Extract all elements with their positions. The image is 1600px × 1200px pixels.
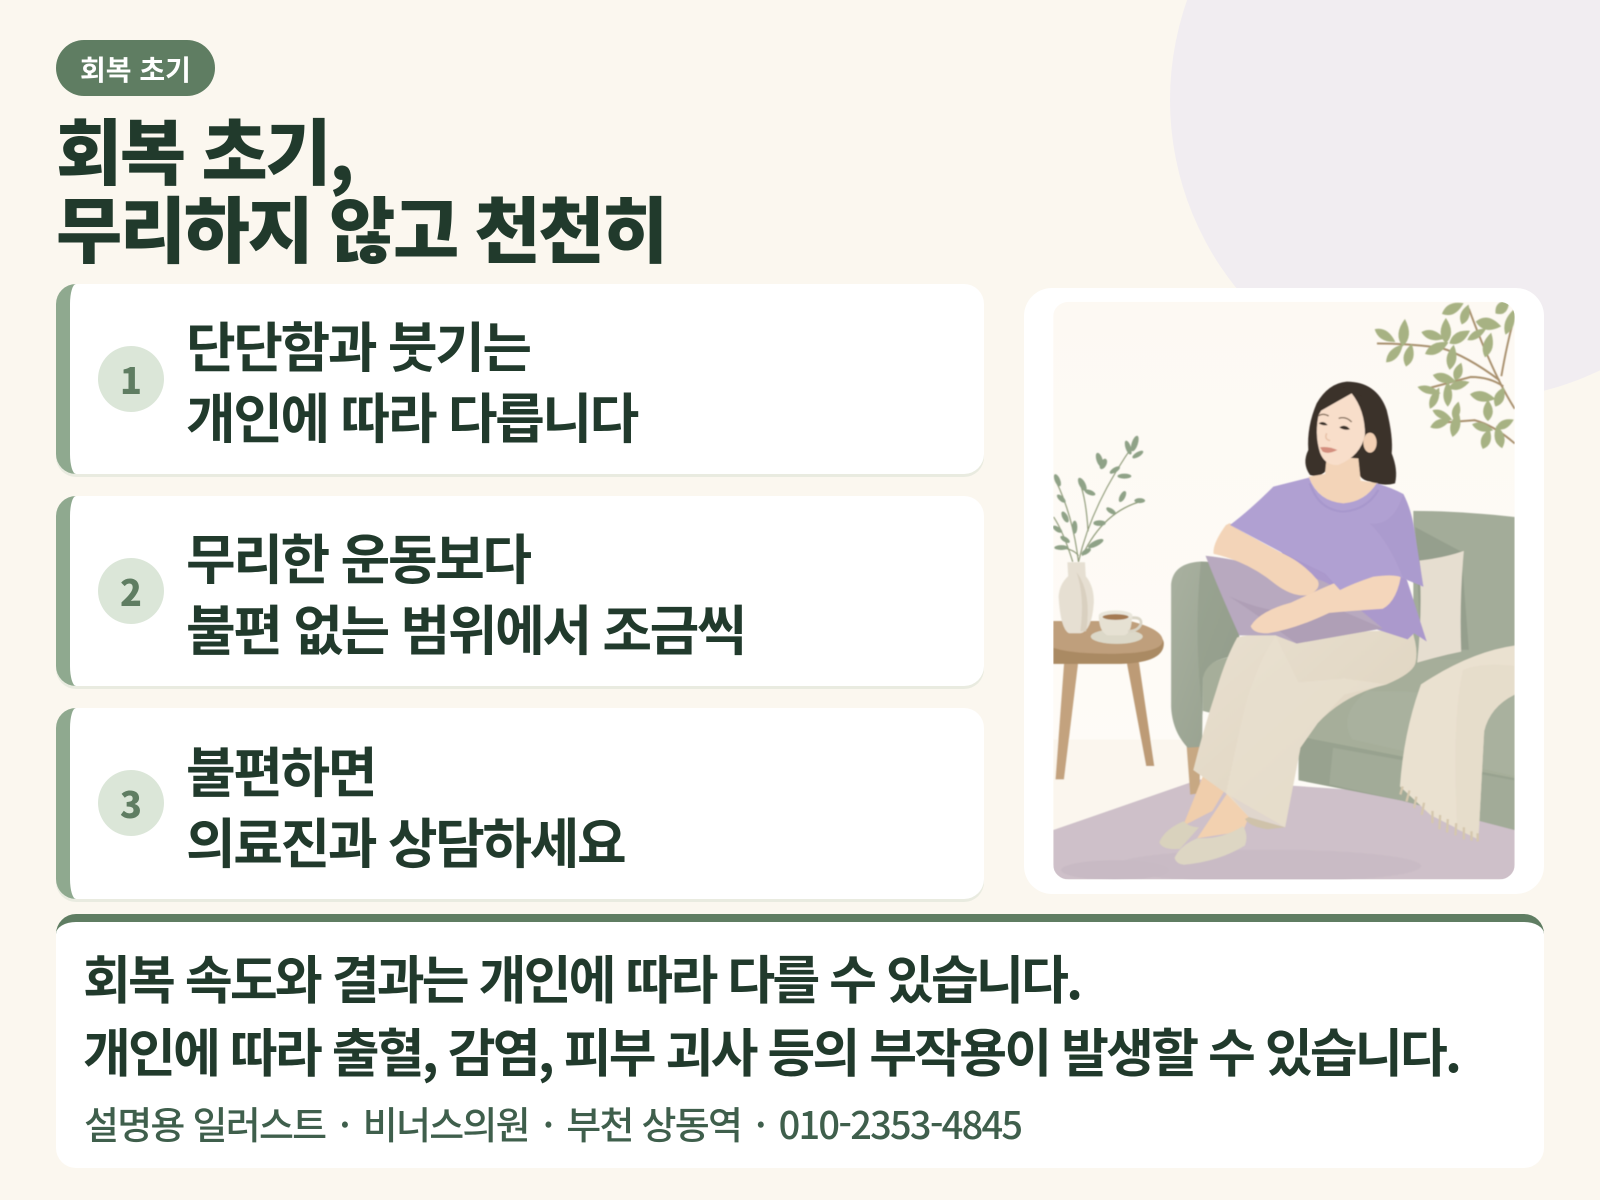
item 1 text: 개인에 따라 다릅니다 [186,375,637,454]
sofa [1171,511,1515,830]
ear [1363,433,1377,453]
rug [1053,779,1515,879]
hair front [1352,393,1380,437]
eyes, nose, brows and lips [1318,414,1352,453]
neck [1309,457,1378,505]
item 3 text: 불편하면 [186,729,375,808]
illustration: woman resting on a sofa [1053,302,1515,880]
cup and saucer [1091,629,1143,644]
number badge 3 [98,770,164,836]
face [1317,393,1365,465]
vase [1059,562,1094,633]
item 3 text [186,729,624,879]
vase plant [1054,441,1144,562]
beige trousers [1193,629,1417,827]
lavender shirt [1230,478,1423,590]
woman: head and shirt [1230,382,1423,590]
number badge 1: 1 [120,353,142,405]
wall and floor [1054,302,1514,738]
throw blanket [1400,646,1515,841]
badge: 회복 초기 [56,40,215,96]
number badge 3: 3 [120,777,142,829]
hair back [1305,382,1396,485]
lavender pillow [1206,556,1383,644]
panel: item 3 [56,708,984,899]
item 2 text: 불편 없는 범위에서 조금씩 [186,587,744,666]
panel: item 1 [56,284,984,474]
item 1 text: 단단함과 붓기는 [186,304,530,383]
number badge 2 [98,558,164,624]
item 2 text [186,516,744,666]
item 2 text: 무리한 운동보다 [186,516,530,595]
number badge 2: 2 [120,565,142,617]
item 3 text: 의료진과 상담하세요 [186,800,624,879]
arms [1213,523,1402,633]
item 1 text [186,304,638,454]
disclaimer text [83,939,1459,1087]
tree branch [1377,309,1515,443]
background circle [1170,0,1600,400]
beige cushion [1417,551,1464,663]
torso under pillow [1279,548,1427,641]
disclaimer text: 개인에 따라 출혈, 감염, 피부 괴사 등의 부작용이 발생할 수 있습니다. [83,1012,1459,1087]
panel: item 2 [56,496,984,686]
title: 회복 초기, [56,95,352,200]
legs and feet [1159,776,1285,865]
disclaimer text: 회복 속도와 결과는 개인에 따라 다를 수 있습니다. [83,939,1080,1014]
number badge 1 [98,346,164,412]
title: 무리하지 않고 천천히 [56,173,666,278]
panel: disclaimer [56,914,1544,1168]
title [56,95,666,278]
badge: 회복 초기: 회복 초기 [80,49,191,89]
side table [1053,621,1164,779]
panel: illustration frame [1024,288,1544,894]
footer credit: 설명용 일러스트 · 비너스의원 · 부천 상동역 · 010-2353-4845 [84,1095,1021,1150]
